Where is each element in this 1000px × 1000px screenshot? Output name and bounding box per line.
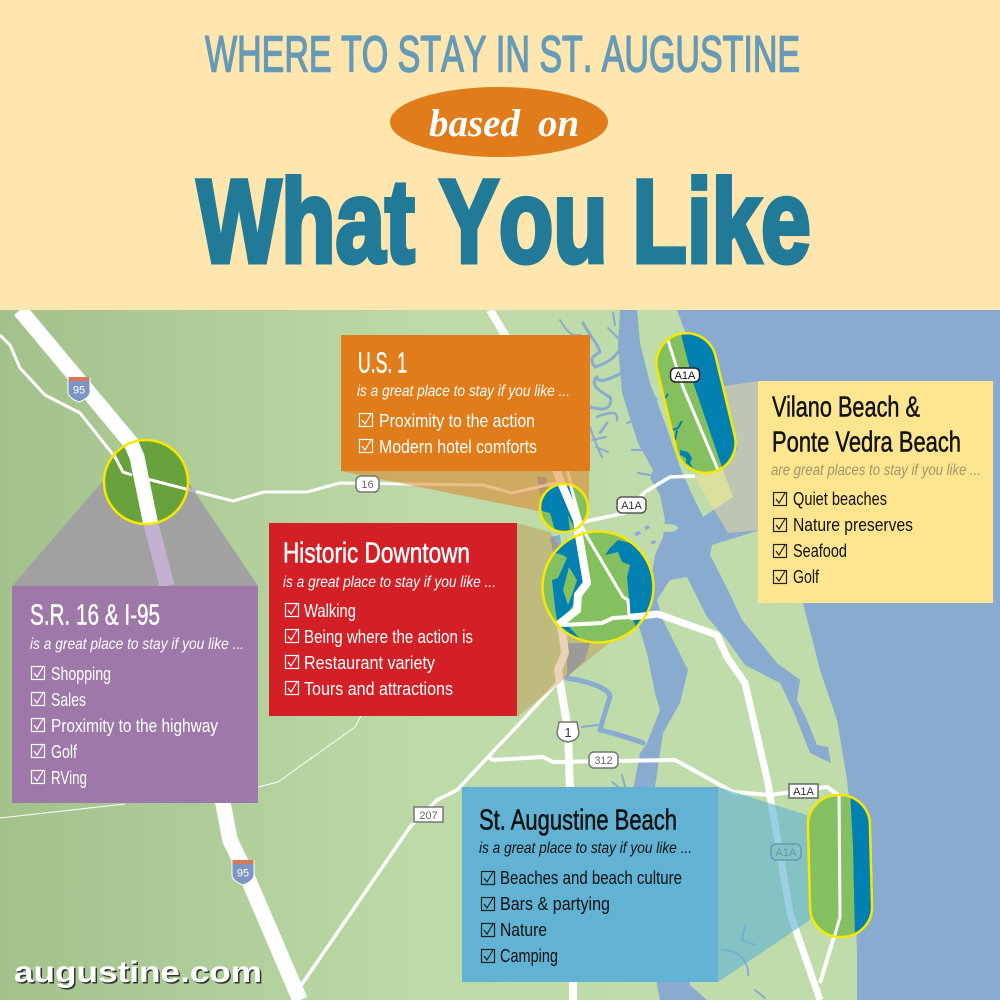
- sign: U.S. 1: 1: [564, 725, 572, 740]
- checklist: [774, 488, 913, 587]
- checklist: Beaches and beach culture: [500, 867, 682, 888]
- checklist: Golf: [51, 741, 78, 762]
- checklist: [286, 600, 473, 699]
- road: old highway west: [0, 334, 114, 456]
- subheading: is a great place to stay if you like ...: [357, 383, 570, 400]
- sign: faint A1A: A1A: [776, 847, 797, 859]
- callout cone: U.S. 1: [341, 471, 589, 512]
- panel: Vilano Beach and Ponte Vedra Beach: [758, 381, 993, 603]
- heading: Vilano and Ponte Vedra: Vilano Beach &: [772, 392, 920, 424]
- sign: faint A1A: [771, 844, 801, 860]
- road: S.R. 16: [194, 481, 557, 502]
- checklist: [32, 663, 219, 788]
- header background: [0, 0, 1000, 310]
- badge: based on: based: [429, 102, 520, 145]
- sign: A1A south: A1A: [793, 786, 815, 798]
- road: U.S. 1 business: [566, 471, 586, 532]
- checklist: Proximity to the highway: [51, 715, 219, 736]
- checklist: Nature: [500, 919, 547, 940]
- callout cone: St. Augustine Beach: [718, 787, 810, 982]
- sign: I-95 north: 95: [73, 384, 85, 396]
- highlight circle: S.R. 16: [102, 438, 190, 526]
- sign: 207: [414, 807, 443, 822]
- sign: U.S. 1: [557, 722, 579, 742]
- highlight circle: Historic Downtown: [542, 530, 660, 642]
- checklist: [482, 867, 682, 966]
- sign: I-95 south: [232, 860, 254, 885]
- panel: Historic Downtown: [269, 523, 517, 716]
- road: S.R. 312: [488, 757, 840, 983]
- sign: A1A center: [617, 497, 646, 513]
- checklist: Shopping: [51, 663, 111, 684]
- subheading: is a great place to stay if you like ...: [30, 636, 244, 653]
- map base: water and land: [0, 310, 1000, 1000]
- callout cone: S.R. 16: [12, 482, 258, 586]
- road: I-95 north and south: [20, 310, 300, 1000]
- sign: A1A capsule: A1A: [675, 370, 696, 382]
- badge: based on: [390, 87, 608, 157]
- subheading: is a great place to stay if you like ...: [479, 840, 692, 857]
- heading: U.S. 1: U.S. 1: [358, 348, 407, 380]
- sign: A1A capsule: [670, 368, 700, 382]
- checklist: Bars & partying: [500, 893, 610, 914]
- checklist: Camping: [500, 945, 558, 966]
- checklist: Proximity to the action: [379, 410, 535, 431]
- road: S.R. 207: [300, 683, 557, 987]
- logo: augustine.com: augustine.com: [14, 956, 262, 989]
- checklist: Walking: [304, 600, 356, 621]
- road: A1A north: [583, 476, 695, 522]
- panel: St. Augustine Beach: [462, 787, 718, 982]
- highlight capsule: Vilano: [655, 332, 737, 474]
- sign: I-95 north: [68, 377, 90, 402]
- tidal creeks: [560, 313, 765, 998]
- water patches: [537, 477, 656, 677]
- highlight capsule: St. Augustine Beach: [806, 794, 874, 938]
- sign: 207: 207: [419, 810, 438, 822]
- callout cone: Vilano: [695, 381, 760, 533]
- sign: A1A south: [789, 784, 818, 798]
- title line: where to stay: WHERE TO STAY IN ST. AUGUSTINE: [205, 27, 800, 83]
- sign: A1A center: A1A: [621, 500, 643, 512]
- checklist: Golf: [793, 566, 820, 587]
- checklist: Tours and attractions: [304, 678, 453, 699]
- main title: what you like: What You Like: [197, 156, 811, 288]
- sign: 16: [356, 476, 379, 492]
- badge: based on: on: [538, 102, 579, 145]
- heading: Vilano and Ponte Vedra: [772, 392, 961, 458]
- checklist: Seafood: [793, 540, 847, 561]
- sign: I-95 south: 95: [237, 868, 249, 880]
- checklist: Restaurant variety: [304, 652, 436, 673]
- road: U.S. 1: [490, 310, 587, 1000]
- sign: 16: 16: [361, 479, 374, 491]
- heading: St. Augustine Beach: St. Augustine Beach: [479, 804, 677, 836]
- heading: Historic Downtown: Historic Downtown: [283, 538, 470, 570]
- callout cone: Historic Downtown: [517, 523, 617, 717]
- highlight circle: U.S. 1: [538, 482, 590, 534]
- panel: S.R. 16 and I-95: [12, 586, 258, 803]
- checklist: Being where the action is: [304, 626, 473, 647]
- road: minor west: [0, 716, 361, 818]
- checklist: [360, 410, 537, 457]
- roads: [0, 310, 840, 1000]
- checklist: Sales: [51, 689, 86, 710]
- heading: S.R. 16 & I-95: S.R. 16 & I-95: [30, 600, 160, 632]
- checklist: RVing: [51, 767, 87, 788]
- checklist: Nature preserves: [793, 514, 913, 535]
- highway signs: [68, 368, 818, 885]
- sign: 312: [589, 752, 618, 768]
- checklist: Quiet beaches: [793, 488, 887, 509]
- logo: augustine.com: augustine.com: [16, 958, 264, 990]
- road: A1A Anastasia: [563, 617, 630, 625]
- checklist: Modern hotel comforts: [379, 436, 537, 457]
- sign: 312: 312: [594, 755, 613, 767]
- subheading: is a great place to stay if you like ...: [283, 574, 496, 591]
- panel: U.S. 1: [341, 335, 590, 471]
